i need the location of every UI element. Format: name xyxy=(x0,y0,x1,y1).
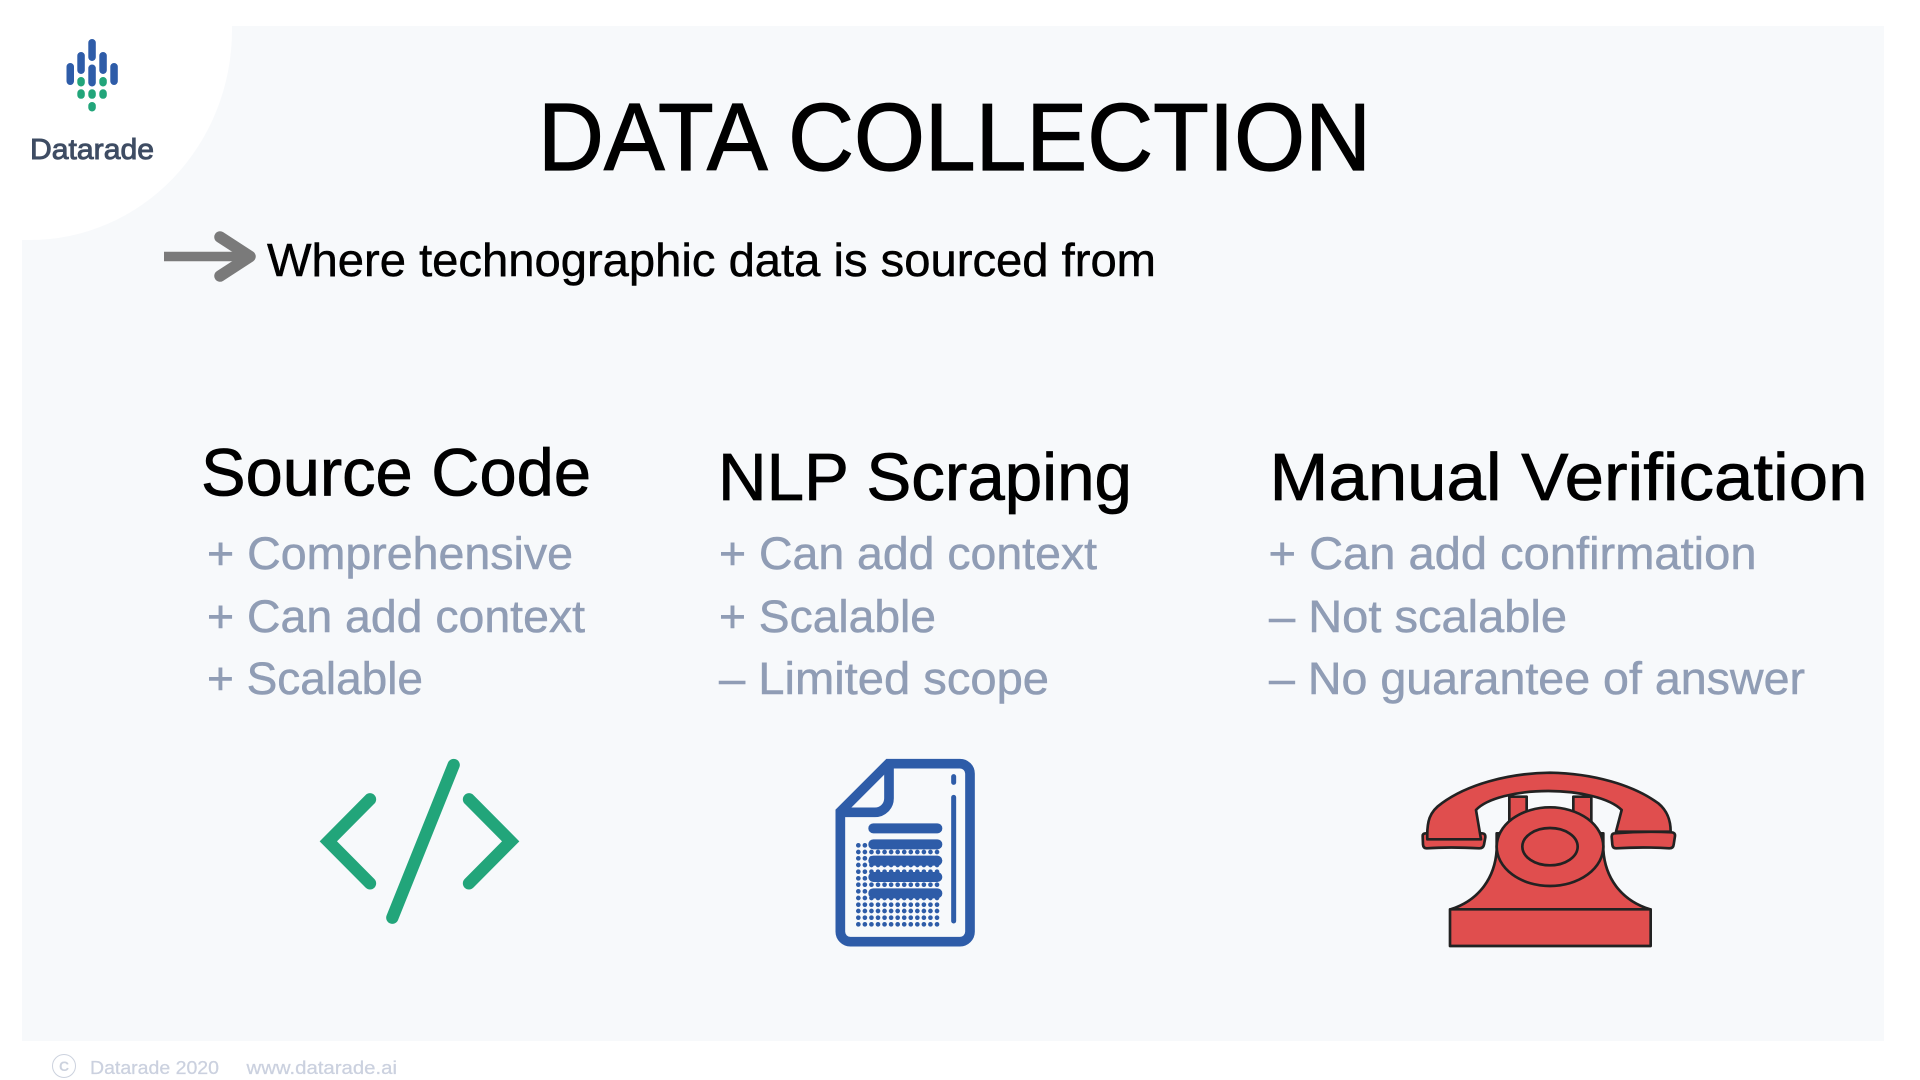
list: NLP Scraping points xyxy=(719,528,1098,704)
column: Source Code xyxy=(201,436,591,918)
icon: telephone xyxy=(1423,773,1675,946)
footer text: Datarade 2020: Datarade 2020 xyxy=(90,1058,219,1078)
heading: NLP Scraping: NLP Scraping xyxy=(718,440,1132,515)
arrow xyxy=(164,237,250,276)
list: NLP Scraping points: + Can add context xyxy=(719,528,1098,579)
subtitle: Where technographic data is sourced from xyxy=(267,234,1156,286)
icon: copyright: C xyxy=(59,1058,69,1074)
list: Manual Verification points: – Not scalable xyxy=(1269,591,1567,642)
icon: copyright xyxy=(52,1054,76,1078)
list: Source Code points: + Can add context xyxy=(207,591,586,642)
footer xyxy=(52,1054,397,1078)
icon: document xyxy=(840,764,970,942)
logo: Datarade: Datarade xyxy=(30,134,154,166)
list: NLP Scraping points: + Scalable xyxy=(719,591,936,642)
heading: Manual Verification: Manual Verification xyxy=(1270,440,1868,515)
list: Source Code points xyxy=(207,528,586,704)
list: Manual Verification points: – No guarantee of answer xyxy=(1269,653,1805,704)
footer text: website: www.datarade.ai xyxy=(245,1058,397,1078)
list: NLP Scraping points: – Limited scope xyxy=(719,653,1049,704)
heading: Source Code: Source Code xyxy=(201,436,591,510)
column: Manual Verification xyxy=(1268,440,1868,946)
list: Manual Verification points xyxy=(1268,528,1805,704)
list: Source Code points: + Scalable xyxy=(207,653,423,704)
title: DATA COLLECTION xyxy=(538,84,1371,191)
logo: Datarade xyxy=(30,39,154,166)
column: NLP Scraping xyxy=(718,440,1132,942)
list: Manual Verification points: + Can add confirmation xyxy=(1268,528,1756,579)
icon: code brackets xyxy=(328,765,511,918)
list: Source Code points: + Comprehensive xyxy=(207,528,573,579)
